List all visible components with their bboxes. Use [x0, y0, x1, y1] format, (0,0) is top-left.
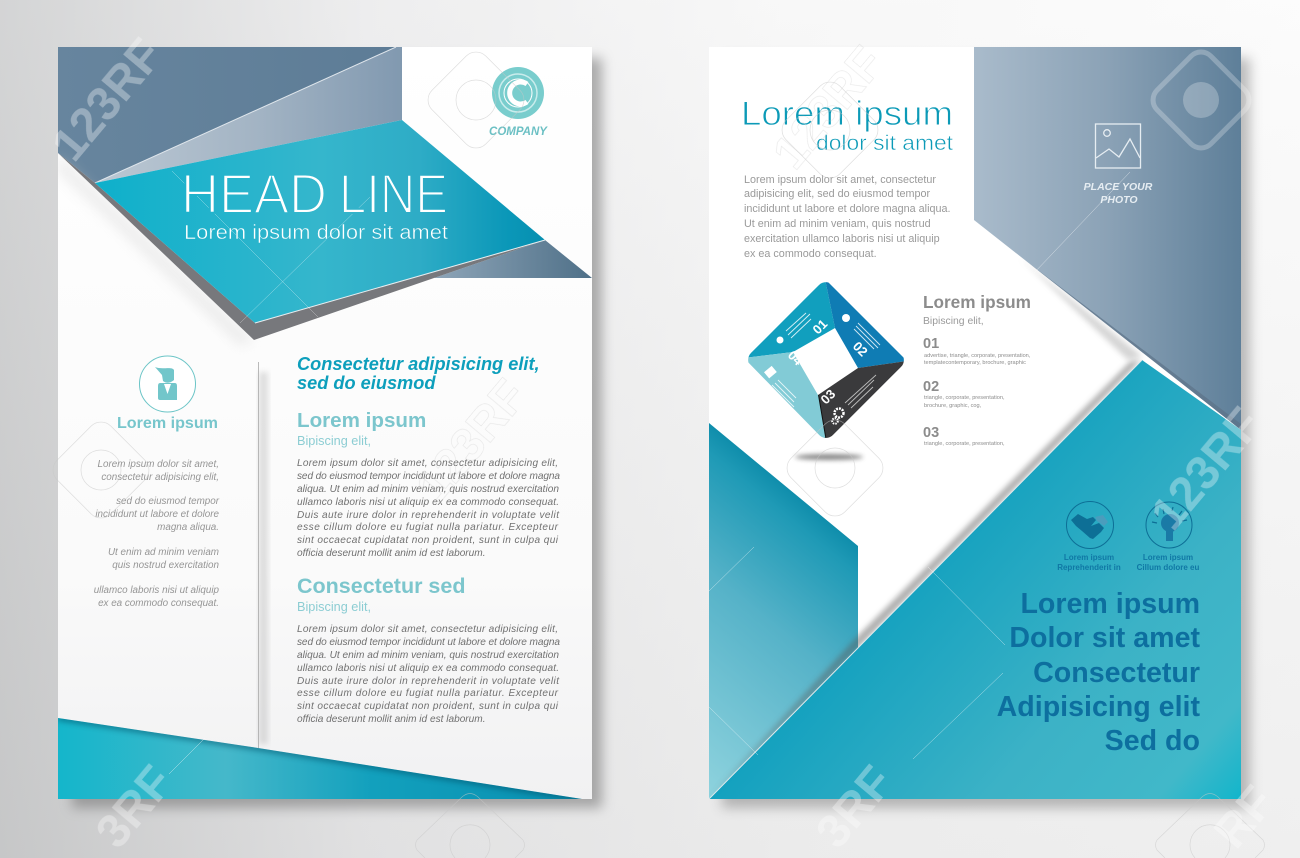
photo placeholder label: PHOTO [1100, 194, 1138, 206]
intro heading: Consectetur adipisicing elit, [297, 354, 540, 374]
section two paragraph: officia deserunt mollit anim id est laborum. [297, 714, 486, 725]
sidebar text: magna aliqua. [157, 522, 219, 533]
slate block dark edge [1030, 264, 1241, 430]
cover shape: edge highlight [255, 240, 545, 323]
sidebar text: consectetur adipisicing elit, [101, 472, 219, 483]
photo block shadow [1033, 270, 1142, 361]
closing statement [997, 588, 1200, 757]
sidebar text: quis nostrud exercitation [112, 560, 220, 571]
closing statement: Dolor sit amet [1009, 622, 1200, 654]
watermarks: 123RF [41, 28, 172, 170]
sidebar text: ex ea commodo consequat. [98, 598, 219, 609]
sidebar text: Lorem ipsum dolor sit amet, [98, 459, 219, 470]
diamond diagram [744, 279, 907, 442]
intro paragraph: adipisicing elit, sed do eiusmod tempor [744, 188, 930, 200]
intro heading: sed do eiusmod [297, 373, 436, 393]
section one paragraph: sed do eiusmod tempor incididunt ut labore et dolore magna [297, 471, 560, 482]
headline [184, 176, 445, 214]
cover shape: right slate triangle [434, 240, 592, 278]
watermarks: 3RF [85, 755, 183, 857]
section one heading: Lorem ipsum [297, 409, 426, 432]
section one paragraph: Duis aute irure dolor in reprehenderit in voluptate velit [297, 510, 560, 521]
section two subheading: Bipiscing elit, [297, 600, 371, 614]
section one subheading: Bipiscing elit, [297, 434, 371, 448]
sidebar text: ullamco laboris nisi ut aliquip [94, 585, 220, 596]
headline subtitle: Lorem ipsum dolor sit amet [184, 222, 448, 244]
segment 03: 03 [818, 386, 838, 407]
segment 04 [744, 348, 826, 442]
icon: handshake [1066, 502, 1114, 548]
intro paragraph: exercitation ullamco laboris nisi ut aliquip [744, 233, 940, 245]
list heading: Lorem ipsum [923, 292, 1031, 312]
closing statement: Consectetur [1033, 657, 1200, 689]
company logo [489, 67, 548, 138]
segment 01 [744, 279, 835, 358]
section one paragraph [297, 458, 560, 559]
icon: photo placeholder [1096, 124, 1140, 168]
intro paragraph: Ut enim ad minim veniam, quis nostrud [744, 218, 931, 230]
cover shape: grey folded edge [58, 153, 545, 340]
teal fold shadow [709, 360, 1141, 799]
section one paragraph: ullamco laboris nisi ut aliquip ex ea commodo consequat. [297, 497, 559, 508]
light bulb caption: Lorem ipsum [1143, 553, 1193, 562]
cover shape: light slate wedge [95, 47, 402, 183]
intro paragraph: incididunt ut labore et dolore magna aliqua. [744, 203, 950, 215]
icon: company swirl [492, 67, 544, 119]
watermarks: 3RF [805, 755, 903, 857]
intro paragraph: ex ea commodo consequat. [744, 248, 877, 260]
watermark outlines on white: 123RF [405, 369, 536, 511]
list item 03: 03 [923, 425, 939, 441]
section two paragraph: aliqua. Ut enim ad minim veniam, quis nostrud exercitation [297, 650, 559, 661]
bottom band inner shadow [58, 718, 582, 799]
sidebar text: sed do eiusmod tempor [116, 496, 220, 507]
light bulb caption: Cillum dolore eu [1137, 563, 1199, 572]
sidebar text: Ut enim ad minim veniam [108, 547, 219, 558]
list item 03 [923, 425, 1005, 447]
headline: LINE [339, 162, 448, 225]
icon: businessman [140, 356, 196, 412]
headline: HEAD [181, 162, 327, 225]
cover shape: highlight line [95, 47, 396, 183]
handshake caption [1057, 553, 1121, 572]
list item 02: triangle, corporate, presentation, [924, 395, 1005, 401]
segment 02 [825, 279, 907, 368]
thin white line on band [169, 738, 205, 774]
column divider with shadow [258, 362, 268, 748]
subtitle: dolor sit amet [816, 132, 953, 155]
sidebar [94, 356, 220, 609]
segment 01: 01 [810, 316, 830, 337]
watermark outlines on white: 123RF [762, 36, 893, 178]
closing statement: Adipisicing elit [997, 691, 1200, 723]
diamond floor shadow [795, 454, 863, 460]
section two paragraph [297, 624, 560, 725]
left page drop shadow [72, 58, 602, 808]
section one paragraph: sint occaecat cupidatat non proident, sunt in culpa qui [297, 535, 559, 546]
watermark outlines on white [405, 36, 893, 511]
section two paragraph: Duis aute irure dolor in reprehenderit in voluptate velit [297, 676, 560, 687]
company name: COMPANY [489, 126, 548, 138]
big teal panel [709, 360, 1241, 799]
closing statement: Lorem ipsum [1020, 588, 1200, 620]
segment 02: 02 [850, 339, 871, 359]
left teal panel [709, 423, 858, 799]
list item 02: 02 [923, 379, 939, 395]
section two paragraph: ullamco laboris nisi ut aliquip ex ea commodo consequat. [297, 663, 559, 674]
sidebar text [94, 459, 220, 609]
section one paragraph: esse cillum dolore eu fugiat nulla pariatur. Excepteur [297, 522, 559, 533]
intro heading [297, 356, 538, 389]
list item 01 [923, 336, 1031, 366]
slate photo block [974, 47, 1241, 430]
list item 01: templatecontemporary, brochure, graphic [924, 360, 1026, 366]
cover shape: dark slate block [58, 47, 396, 183]
big teal highlight edge [709, 360, 1142, 799]
handshake caption: Lorem ipsum [1064, 553, 1114, 562]
intro paragraph: Lorem ipsum dolor sit amet, consectetur [744, 174, 936, 186]
list item 03: triangle, corporate, presentation, [924, 441, 1005, 447]
photo placeholder label: PLACE YOUR [1084, 181, 1153, 193]
section two heading: Consectetur sed [297, 574, 465, 598]
list subheading: Bipiscing elit, [923, 316, 984, 327]
section one paragraph: Lorem ipsum dolor sit amet, consectetur adipisicing elit, [297, 458, 558, 469]
sidebar heading: Lorem ipsum [117, 414, 218, 432]
right page drop shadow [722, 58, 1250, 808]
title: Lorem ipsum [741, 95, 953, 133]
watermarks: RF [1203, 775, 1284, 857]
icon: light bulb [1146, 502, 1192, 548]
list item 02: brochure, graphic, cog, [924, 403, 982, 409]
cover shape: teal headline panel [95, 120, 545, 323]
intro paragraph [744, 174, 950, 260]
section two paragraph: sint occaecat cupidatat non proident, sunt in culpa qui [297, 701, 559, 712]
thin white construction lines [709, 172, 1130, 759]
bottom teal band [58, 718, 582, 799]
section two paragraph: Lorem ipsum dolor sit amet, consectetur adipisicing elit, [297, 624, 558, 635]
list item 01: advertise, triangle, corporate, presentation, [924, 353, 1031, 359]
sidebar text: incididunt ut labore et dolore [95, 509, 220, 520]
light bulb caption [1137, 553, 1199, 572]
segment 03 [818, 361, 907, 442]
closing statement: Sed do [1105, 725, 1200, 757]
section one paragraph: officia deserunt mollit anim id est laborum. [297, 548, 486, 559]
panel: left brochure page [58, 47, 592, 799]
watermark logo on slate block [1147, 46, 1255, 154]
section two paragraph: sed do eiusmod tempor incididunt ut labore et dolore magna [297, 637, 560, 648]
handshake caption: Reprehenderit in [1057, 563, 1121, 572]
watermarks: 123RF [1140, 397, 1271, 539]
list item 02 [923, 379, 1005, 409]
photo placeholder label [1084, 183, 1152, 203]
section one paragraph: aliqua. Ut enim ad minim veniam, quis nostrud exercitation [297, 484, 559, 495]
segment 04: 04 [785, 348, 806, 369]
thin white construction lines [172, 171, 370, 323]
list item 01: 01 [923, 336, 939, 352]
section two paragraph: esse cillum dolore eu fugiat nulla pariatur. Excepteur [297, 688, 559, 699]
panel: right brochure page [709, 47, 1241, 799]
cover shape: soft shadow under folded panel [58, 153, 254, 346]
